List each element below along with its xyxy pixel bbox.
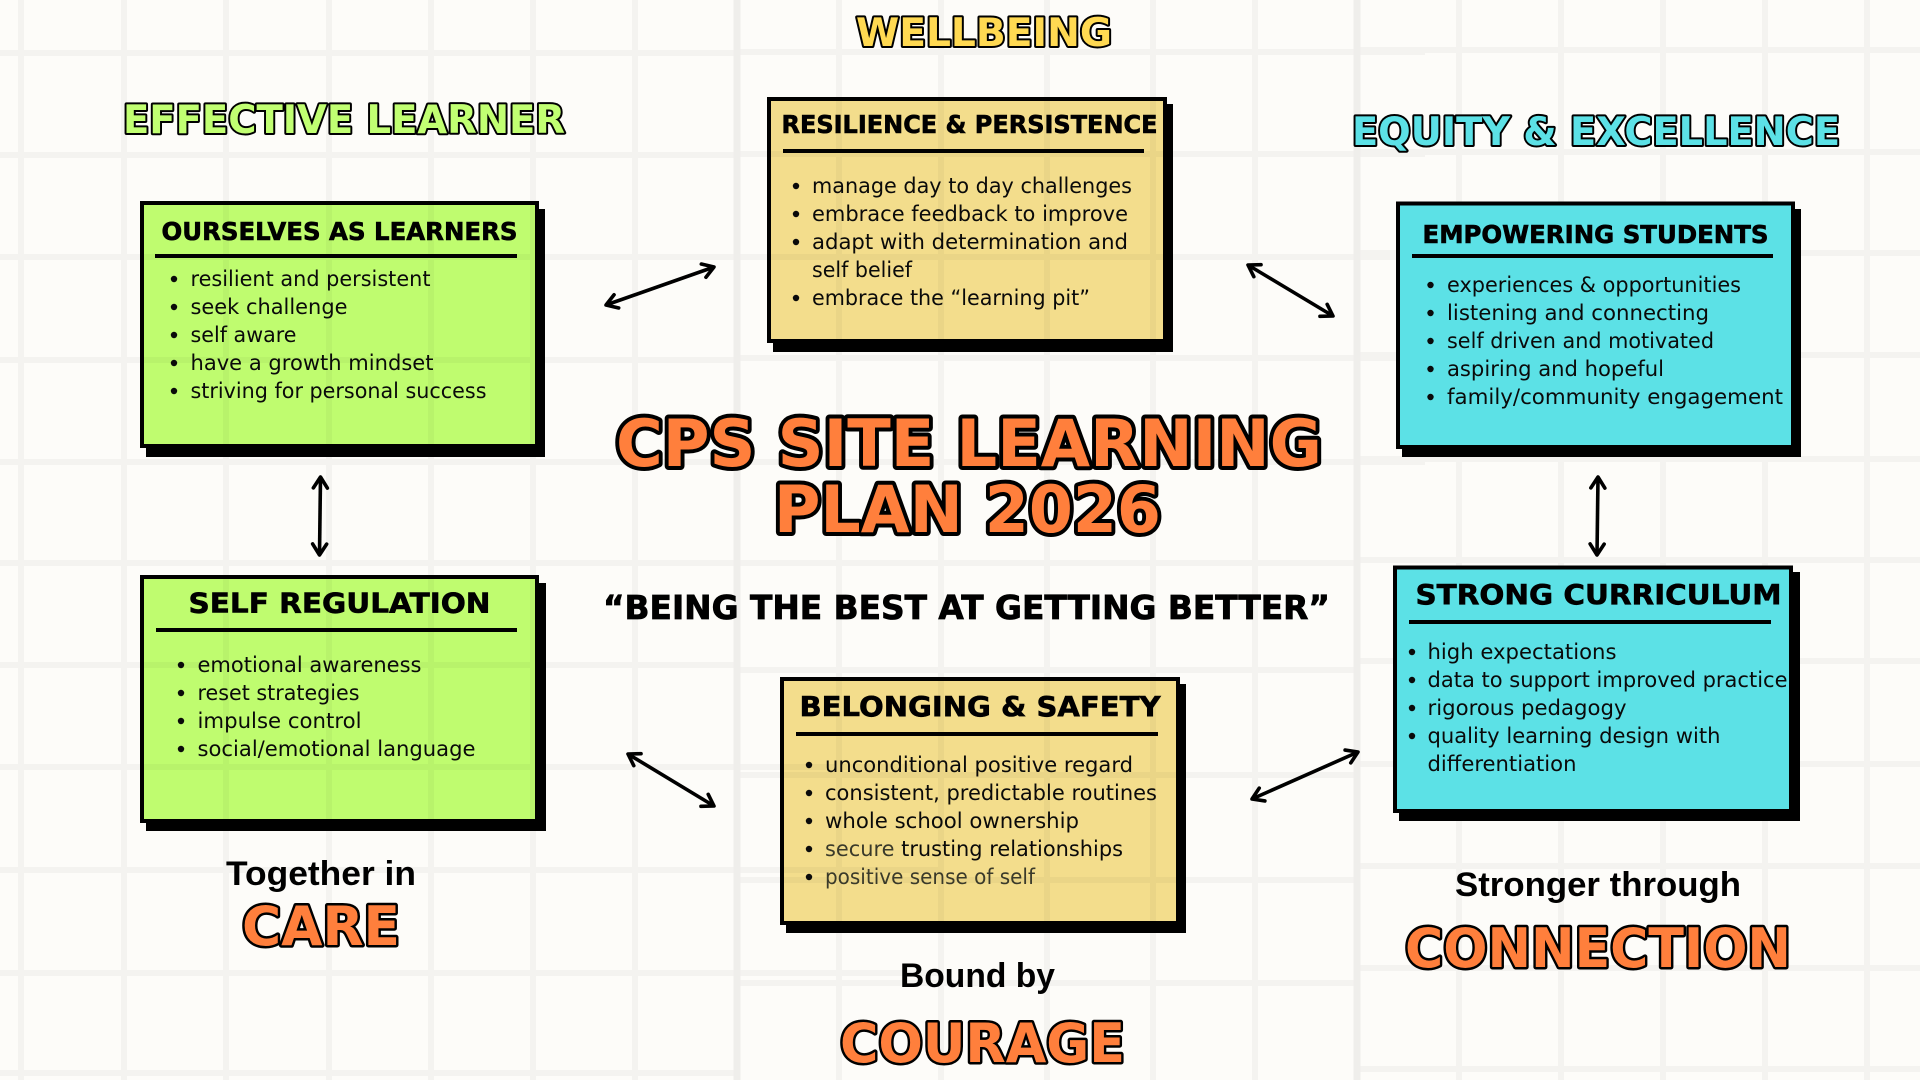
panel: ourselves as learners: [142, 203, 545, 457]
bullet list: belonging and safety: consistent, predictable routines: [825, 781, 1157, 806]
bullet list: ourselves as learners: [171, 267, 487, 404]
caption: bound by courage: COURAGE: [840, 1012, 1125, 1075]
caption: bound by courage: Bound by: [900, 957, 1055, 995]
bullet list: empowering students: experiences & opportunities: [1447, 273, 1741, 298]
bullet list: ourselves as learners: striving for personal success: [190, 379, 486, 404]
bullet list: belonging and safety: [806, 753, 1157, 890]
title: PLAN 2026: [774, 473, 1161, 548]
bullet list: ourselves as learners: self aware: [190, 323, 296, 348]
panel heading: self regulation: SELF REGULATION: [188, 586, 490, 620]
bullet list: self regulation: reset strategies: [198, 681, 360, 706]
arrow: empowering to curriculum: [1597, 477, 1598, 555]
bullet list: belonging and safety: unconditional positive regard: [825, 753, 1133, 778]
panel: self regulation: [142, 577, 546, 831]
panel: belonging and safety: [782, 679, 1186, 933]
title: [616, 407, 1322, 548]
panel heading: empowering students: EMPOWERING STUDENTS: [1422, 220, 1768, 249]
caption: stronger through connection: Stronger through: [1455, 866, 1741, 904]
panel: strong curriculum: [1395, 568, 1800, 821]
bullet list: empowering students: listening and connecting: [1447, 301, 1709, 326]
bullet list: strong curriculum: [1409, 640, 1788, 777]
bullet list: belonging and safety: whole school ownership: [825, 809, 1079, 834]
bullet list: ourselves as learners: seek challenge: [190, 295, 348, 320]
bullet list: resilience and persistence: self belief: [812, 258, 912, 283]
bullet list: resilience and persistence: manage day to day challenges: [812, 174, 1132, 199]
bullet list: resilience and persistence: adapt with determination and: [812, 230, 1128, 255]
arrow: resilience to empowering: [1248, 265, 1333, 316]
caption: stronger through connection: [1405, 866, 1791, 980]
bullet list: empowering students: [1427, 273, 1783, 410]
bullet list: self regulation: [178, 653, 476, 762]
bullet list: empowering students: self driven and motivated: [1447, 329, 1714, 354]
heading: equity and excellence: EQUITY & EXCELLENCE: [1352, 110, 1840, 155]
arrow: belonging to curriculum: [1252, 752, 1358, 799]
bullet list: belonging and safety: secure trusting relationships: [825, 837, 1123, 862]
panel: resilience and persistence: [769, 99, 1173, 352]
arrow: learners to resilience: [606, 267, 714, 305]
bullet list: self regulation: emotional awareness: [198, 653, 422, 678]
bullet list: strong curriculum: high expectations: [1428, 640, 1616, 665]
bullet list: resilience and persistence: embrace the “learning pit”: [812, 286, 1090, 311]
heading: effective learner: EFFECTIVE LEARNER: [123, 98, 565, 143]
panel heading: ourselves as learners: OURSELVES AS LEARNERS: [162, 217, 518, 246]
bullet list: strong curriculum: differentiation: [1428, 752, 1576, 777]
panel heading: resilience and persistence: RESILIENCE & PERSISTENCE: [782, 110, 1158, 139]
bullet list: strong curriculum: data to support improved practice: [1428, 668, 1788, 693]
arrow: learners to self regulation: [320, 477, 321, 555]
bullet list: strong curriculum: rigorous pedagogy: [1428, 696, 1627, 721]
bullet list: ourselves as learners: have a growth mindset: [190, 351, 434, 376]
bullet list: empowering students: aspiring and hopeful: [1447, 357, 1664, 382]
title: CPS SITE LEARNING: [616, 407, 1322, 482]
bullet list: empowering students: family/community engagement: [1447, 385, 1783, 410]
bullet list: ourselves as learners: resilient and persistent: [190, 267, 430, 292]
caption: together in care: CARE: [242, 895, 400, 958]
panel heading: belonging and safety: BELONGING & SAFETY: [800, 690, 1161, 723]
panel: empowering students: [1398, 204, 1801, 457]
caption: together in care: [226, 855, 416, 958]
heading: wellbeing: WELLBEING: [856, 11, 1112, 56]
bullet list: strong curriculum: quality learning design with: [1428, 724, 1720, 749]
caption: together in care: Together in: [226, 855, 416, 893]
bullet list: self regulation: social/emotional language: [198, 737, 476, 762]
bullet list: self regulation: impulse control: [198, 709, 362, 734]
caption: stronger through connection: CONNECTION: [1405, 917, 1791, 980]
caption: bound by courage: [840, 957, 1125, 1075]
panel heading: strong curriculum: STRONG CURRICULUM: [1416, 578, 1782, 611]
tagline: “BEING THE BEST AT GETTING BETTER”: [603, 588, 1330, 627]
bullet list: belonging and safety: positive sense of self: [825, 865, 1035, 890]
bullet list: resilience and persistence: [793, 174, 1132, 311]
arrow: self regulation to belonging: [628, 754, 714, 806]
bullet list: resilience and persistence: embrace feedback to improve: [812, 202, 1128, 227]
